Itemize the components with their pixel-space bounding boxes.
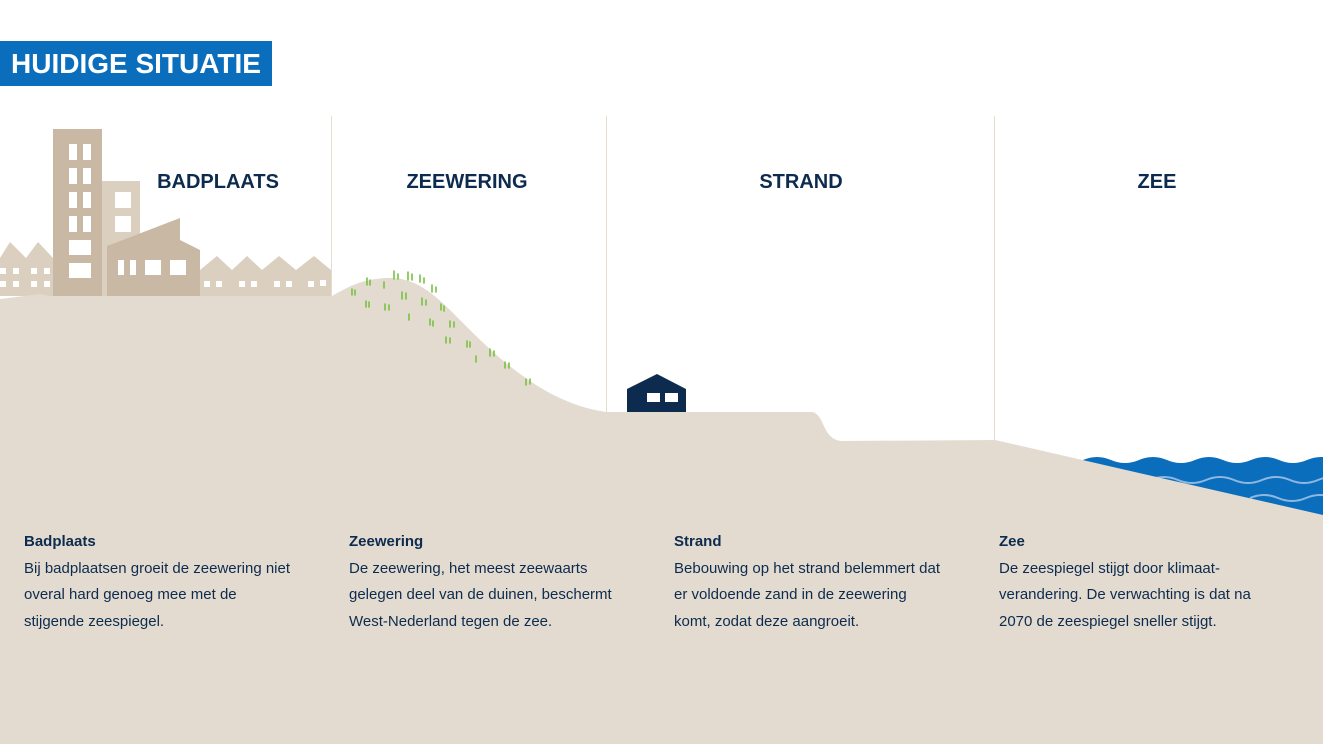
text: badplaats: Badplaats <box>24 533 96 550</box>
water <box>1083 457 1323 520</box>
grass <box>352 271 530 385</box>
buildings <box>0 129 331 298</box>
heading: strand: STRAND <box>759 171 843 193</box>
text: zeewering: Zeewering <box>349 533 423 550</box>
text: zeewering: De zeewering, het meest zeewaarts gelegen deel van de duinen, beschermt West-Nederland tegen de zee. <box>349 560 612 630</box>
text: strand: Strand <box>674 533 722 550</box>
dividers <box>332 116 994 440</box>
text: zee: De zeespiegel stijgt door klimaat-verandering. De verwachting is dat na 2070 de zeespiegel sneller stijgt. <box>999 560 1251 630</box>
ground <box>0 278 1323 744</box>
title: HUIDIGE SITUATIE <box>11 48 261 79</box>
heading: badplaats: BADPLAATS <box>157 171 279 193</box>
heading: zee: ZEE <box>1138 171 1176 193</box>
title <box>0 41 272 86</box>
text: strand: Bebouwing op het strand belemmert dat er voldoende zand in de zeewering komt, zodat deze aangroeit. <box>674 560 940 630</box>
text: badplaats: Bij badplaatsen groeit de zeewering niet overal hard genoeg mee met de stijgende zeespiegel. <box>24 560 290 630</box>
text: zee: Zee <box>999 533 1025 550</box>
icon: hut <box>627 374 686 412</box>
heading: zeewering: ZEEWERING <box>406 171 528 193</box>
